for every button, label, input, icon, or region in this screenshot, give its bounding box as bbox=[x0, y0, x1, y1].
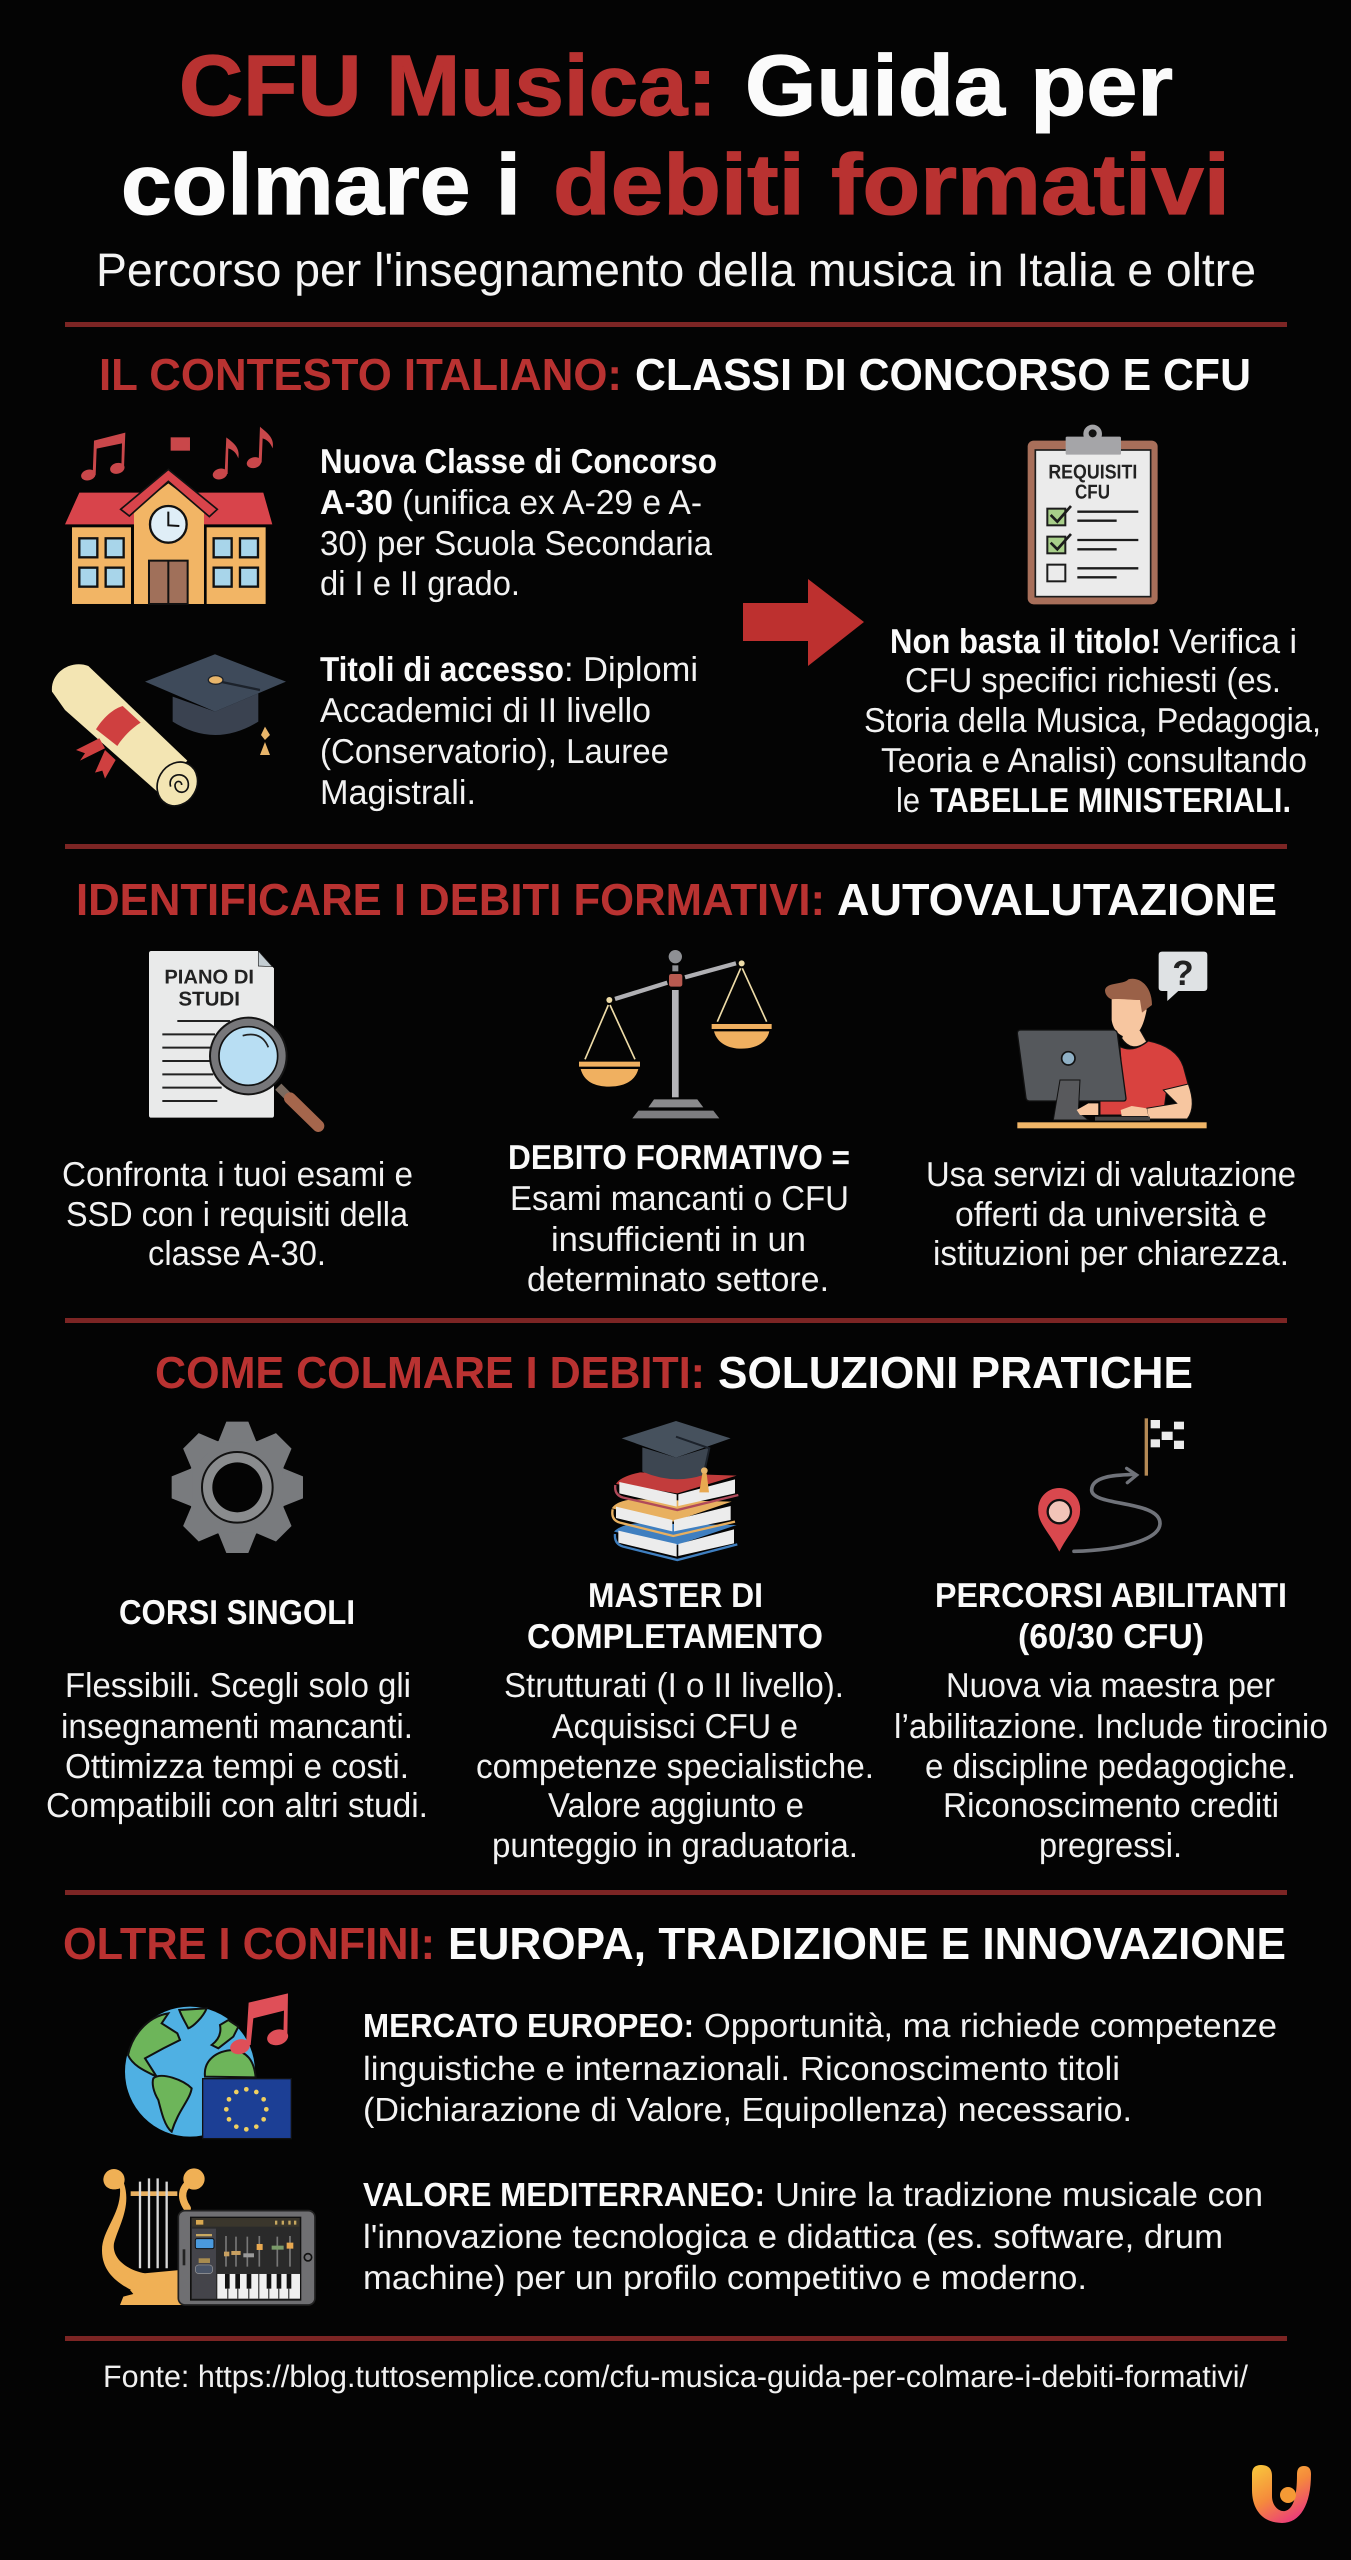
icon: globe with note and EU flag bbox=[125, 1993, 291, 2139]
heading: identificare i debiti bbox=[76, 874, 1277, 925]
text: nuova classe di concorso: (unifica ex A-29 e A- bbox=[402, 484, 702, 522]
text: master di completamento: punteggio in graduatoria. bbox=[492, 1827, 858, 1865]
logo bbox=[1252, 2465, 1311, 2523]
text: mercato europeo: Opportunità, ma richiede competenze bbox=[704, 2008, 1277, 2045]
heading: oltre i confini bbox=[63, 1918, 1286, 1969]
text: percorsi abilitanti: l’abilitazione. Include tirocinio bbox=[894, 1708, 1328, 1746]
text: titoli di accesso: Accademici di II livello bbox=[320, 692, 651, 730]
text: servizi di valutazione: offerti da università e bbox=[955, 1196, 1267, 1234]
icon: gear bbox=[172, 1422, 303, 1553]
title: debiti formativi bbox=[553, 137, 1230, 233]
heading: oltre i confini: OLTRE I CONFINI: bbox=[63, 1918, 435, 1969]
text: corsi singoli: Ottimizza tempi e costi. bbox=[65, 1748, 409, 1786]
text: master di completamento: MASTER DI bbox=[588, 1577, 763, 1615]
text: titoli di accesso: Titoli di accesso bbox=[320, 651, 564, 689]
text: non basta il titolo: CFU specifici richiesti (es. bbox=[905, 662, 1281, 700]
text: percorsi abilitanti: Riconoscimento crediti bbox=[943, 1787, 1279, 1825]
heading: il contesto italiano bbox=[99, 349, 1251, 400]
text: percorsi abilitanti: e discipline pedagogiche. bbox=[925, 1748, 1296, 1786]
text: non basta il titolo bbox=[864, 623, 1321, 820]
text: master di completamento: Strutturati (I o II livello). bbox=[504, 1667, 844, 1705]
panel: come colmare i debiti bbox=[46, 1347, 1328, 1865]
text: master di completamento bbox=[476, 1577, 874, 1865]
icon: balance scale bbox=[579, 950, 772, 1118]
text: master di completamento: COMPLETAMENTO bbox=[527, 1618, 823, 1656]
text: mercato europeo: linguistiche e internazionali. Riconoscimento titoli bbox=[363, 2051, 1120, 2088]
text: percorsi abilitanti bbox=[894, 1577, 1328, 1865]
text: corsi singoli bbox=[46, 1594, 428, 1825]
text: non basta il titolo: Verifica i bbox=[1169, 623, 1297, 661]
text: confronta esami: classe A-30. bbox=[148, 1235, 326, 1273]
icon: clipboard requisiti cfu bbox=[1028, 425, 1158, 604]
text: debito formativo: insufficienti in un bbox=[551, 1221, 806, 1259]
text: nuova classe di concorso: 30) per Scuola Secondaria bbox=[320, 525, 713, 563]
text: valore mediterraneo: VALORE MEDITERRANEO: bbox=[363, 2177, 765, 2214]
icon: school with music notes bbox=[65, 427, 273, 604]
text: debito formativo: determinato settore. bbox=[527, 1261, 829, 1299]
text: non basta il titolo: le bbox=[896, 782, 920, 820]
text: nuova classe di concorso: A-30 bbox=[320, 484, 393, 522]
text: debito formativo: DEBITO FORMATIVO = bbox=[508, 1139, 850, 1177]
icon: piano di studi with magnifier: STUDI bbox=[178, 988, 240, 1010]
panel: il contesto italiano bbox=[52, 349, 1321, 820]
text: nuova classe di concorso: di I e II grado. bbox=[320, 565, 520, 603]
text: valore mediterraneo: machine) per un profilo competitivo e moderno. bbox=[363, 2260, 1087, 2297]
text: debito formativo bbox=[508, 1139, 850, 1299]
text: corsi singoli: Compatibili con altri studi. bbox=[46, 1787, 428, 1825]
text: master di completamento: Acquisisci CFU e bbox=[552, 1708, 798, 1746]
text: titoli di accesso: (Conservatorio), Lauree bbox=[320, 733, 669, 771]
icon: diploma and graduation cap bbox=[52, 654, 286, 813]
icon: person at computer bbox=[1017, 952, 1207, 1128]
text: non basta il titolo: Teoria e Analisi) consultando bbox=[881, 742, 1307, 780]
text: percorsi abilitanti: pregressi. bbox=[1039, 1827, 1182, 1865]
text: percorsi abilitanti: Nuova via maestra per bbox=[946, 1667, 1275, 1705]
heading: come colmare i debiti bbox=[155, 1347, 1193, 1398]
text: confronta esami bbox=[62, 1156, 413, 1273]
text: servizi di valutazione bbox=[926, 1156, 1296, 1273]
text: nuova classe di concorso bbox=[320, 443, 717, 603]
text: mercato europeo bbox=[363, 2008, 1277, 2129]
text: mercato europeo: (Dichiarazione di Valore, Equipollenza) necessario. bbox=[363, 2092, 1132, 2129]
text: valore mediterraneo: l'innovazione tecnologica e didattica (es. software, drum bbox=[363, 2219, 1223, 2256]
icon: clipboard requisiti cfu: REQUISITI bbox=[1048, 460, 1137, 483]
text: titoli di accesso bbox=[320, 651, 698, 812]
title: colmare i bbox=[121, 137, 521, 233]
icon: person at computer: ? bbox=[1172, 954, 1194, 993]
icon: piano di studi with magnifier: PIANO DI bbox=[164, 965, 254, 988]
text: percorsi abilitanti: (60/30 CFU) bbox=[1018, 1618, 1204, 1656]
text: servizi di valutazione: Usa servizi di valutazione bbox=[926, 1156, 1296, 1194]
text: non basta il titolo: Storia della Musica, Pedagogia, bbox=[864, 702, 1321, 740]
subtitle: Percorso per l'insegnamento della musica in Italia e oltre bbox=[96, 243, 1256, 296]
heading: identificare i debiti: IDENTIFICARE I DEBITI FORMATIVI: bbox=[76, 874, 825, 925]
title: CFU Musica: bbox=[179, 38, 717, 134]
heading: oltre i confini: EUROPA, TRADIZIONE E INNOVAZIONE bbox=[448, 1918, 1286, 1969]
arrow bbox=[743, 579, 864, 666]
text: master di completamento: Valore aggiunto e bbox=[548, 1787, 804, 1825]
text: confronta esami: Confronta i tuoi esami e bbox=[62, 1156, 413, 1194]
icon: route with pin and flag bbox=[1038, 1418, 1184, 1552]
icon: lyre and tablet synthesizer bbox=[102, 2168, 315, 2305]
text: percorsi abilitanti: PERCORSI ABILITANTI bbox=[935, 1577, 1287, 1615]
text: master di completamento: competenze specialistiche. bbox=[476, 1748, 874, 1786]
heading: come colmare i debiti: SOLUZIONI PRATICHE bbox=[718, 1347, 1193, 1398]
source line: Fonte: https://blog.tuttosemplice.com/cfu-musica-guida-per-colmare-i-debiti-formativi/ bbox=[103, 2359, 1248, 2394]
heading: come colmare i debiti: COME COLMARE I DEBITI: bbox=[155, 1347, 705, 1398]
text: non basta il titolo: Non basta il titolo! bbox=[890, 623, 1161, 661]
title: Guida per bbox=[745, 38, 1173, 134]
text: non basta il titolo: TABELLE MINISTERIALI. bbox=[930, 782, 1291, 820]
title bbox=[121, 38, 1230, 233]
text: nuova classe di concorso: Nuova Classe di Concorso bbox=[320, 443, 717, 481]
text: servizi di valutazione: istituzioni per chiarezza. bbox=[933, 1235, 1289, 1273]
text: debito formativo: Esami mancanti o CFU bbox=[510, 1180, 849, 1218]
text: corsi singoli: insegnamenti mancanti. bbox=[61, 1708, 413, 1746]
heading: identificare i debiti: AUTOVALUTAZIONE bbox=[837, 874, 1277, 925]
text: titoli di accesso: Magistrali. bbox=[320, 774, 476, 812]
icon: piano di studi with magnifier bbox=[149, 951, 318, 1126]
text: titoli di accesso: : Diplomi bbox=[564, 651, 698, 689]
text: valore mediterraneo bbox=[363, 2177, 1263, 2297]
text: valore mediterraneo: Unire la tradizione musicale con bbox=[775, 2177, 1263, 2214]
text: confronta esami: SSD con i requisiti della bbox=[66, 1196, 409, 1234]
text: corsi singoli: CORSI SINGOLI bbox=[119, 1594, 355, 1632]
icon: books with graduation cap bbox=[612, 1421, 738, 1560]
icon: clipboard requisiti cfu: CFU bbox=[1075, 481, 1110, 503]
heading: il contesto italiano: IL CONTESTO ITALIANO: bbox=[99, 349, 622, 400]
text: mercato europeo: MERCATO EUROPEO: bbox=[363, 2008, 694, 2045]
text: corsi singoli: Flessibili. Scegli solo gli bbox=[65, 1667, 411, 1705]
heading: il contesto italiano: CLASSI DI CONCORSO E CFU bbox=[635, 349, 1251, 400]
panel: oltre i confini bbox=[63, 1918, 1286, 2305]
panel: identificare i debiti formativi bbox=[62, 874, 1296, 1299]
